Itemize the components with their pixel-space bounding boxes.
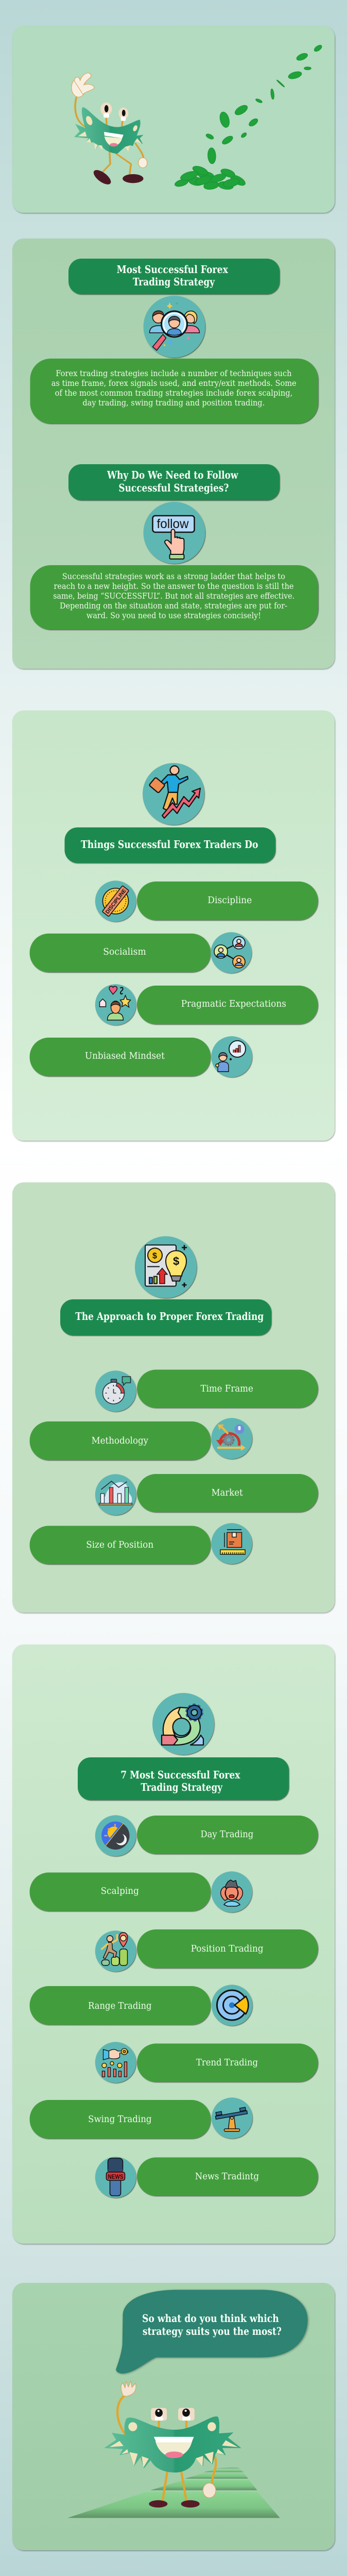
pill: pragmatic expectations: Pragmatic Expectations: [181, 999, 286, 1009]
panel: things successful forex traders do: [12, 710, 335, 1141]
pill: day trading: [137, 1816, 318, 1854]
text block: why follow strategies: ward. So you need to use strategies concisely!: [86, 611, 261, 620]
icon: market bar chart: [95, 1474, 136, 1515]
heading: things successful forex traders do: [65, 827, 275, 863]
item: time frame: [95, 1369, 318, 1412]
icon: follow button with pointing hand: follow: [157, 517, 189, 531]
pill: unbiased mindset: [30, 1038, 211, 1076]
item: socialism: [30, 932, 252, 973]
pill: unbiased mindset: Unbiased Mindset: [85, 1051, 165, 1061]
pill: trend trading: Trend Trading: [196, 2058, 258, 2068]
heading: the approach to proper forex trading: The Approach to Proper Forex Trading: [75, 1310, 264, 1323]
icon: report with coin and dollar bulb: $: [152, 1252, 157, 1260]
panel: closing question: [12, 2283, 335, 2550]
icon: follow button with pointing hand: [143, 502, 205, 564]
heading: most successful forex trading strategy: [68, 259, 280, 294]
pill: scalping: Scalping: [101, 1886, 139, 1896]
icon: businessman climbing rising arrow: [143, 763, 204, 825]
icon: man with chart thought bubble: [211, 1036, 252, 1077]
icon: news microphone: NEWS: [108, 2174, 124, 2180]
text block: forex trading strategies: [30, 359, 318, 423]
icon: social network of people: [211, 932, 252, 973]
icon: process ring with gear: [152, 1693, 214, 1755]
icon: discipline stamp: [95, 880, 136, 922]
icon: stressed man: [211, 1871, 252, 1912]
heading: most successful forex trading strategy: Trading Strategy: [133, 276, 215, 288]
item: trend trading: [95, 2042, 318, 2083]
item: day trading: [95, 1815, 318, 1856]
pill: day trading: Day Trading: [201, 1829, 253, 1840]
pill: position trading: [137, 1929, 318, 1968]
heading: why do we need to follow successful strategies: Why Do We Need to Follow: [107, 469, 239, 481]
pill: time frame: Time Frame: [201, 1384, 253, 1394]
speech bubble: [116, 2290, 307, 2374]
pill: discipline: Discipline: [207, 895, 252, 906]
pill: market: [137, 1474, 318, 1512]
pill: methodology: [30, 1421, 211, 1460]
panel: the approach to proper forex trading: [12, 1182, 335, 1613]
pill: pragmatic expectations: [137, 986, 318, 1024]
panel: most successful forex trading strategy: [12, 239, 335, 669]
text block: why follow strategies: [30, 565, 318, 630]
text block: why follow strategies: Successful strategies work as a strong ladder that helps to: [62, 572, 285, 581]
item: pragmatic expectations: [95, 984, 318, 1025]
item: unbiased mindset: [30, 1036, 252, 1077]
icon: people under magnifying glass: [143, 296, 205, 358]
pill: position trading: Position Trading: [191, 1944, 264, 1954]
heading: most successful forex trading strategy: Most Successful Forex: [117, 263, 229, 276]
icon: day and night: [95, 1815, 136, 1856]
icon: climbing to location pin: [95, 1930, 136, 1972]
text block: why follow strategies: reach to a new height. So the answer to the question is still the: [54, 582, 293, 591]
speech bubble: strategy suits you the most?: [143, 2325, 282, 2337]
item: swing trading: [30, 2097, 252, 2139]
item: methodology: [30, 1418, 252, 1460]
illustration: waving mascot: [72, 73, 147, 187]
heading: why do we need to follow successful strategies: Successful Strategies?: [118, 482, 229, 494]
pill: methodology: Methodology: [92, 1436, 148, 1446]
heading: the approach to proper forex trading: [60, 1299, 271, 1335]
icon: radar target: [212, 1985, 252, 2026]
speech bubble: So what do you think which: [142, 2312, 279, 2325]
heading: 7 most successful forex trading strategy: [78, 1757, 289, 1800]
item: scalping: [30, 1871, 252, 1912]
illustration: green steps: [67, 2467, 280, 2518]
text block: forex trading strategies: as time frame, forex signals used, and entry/exit methods. Some: [51, 379, 297, 388]
item: size of position: [30, 1523, 252, 1564]
pill: socialism: Socialism: [103, 947, 146, 957]
heading: things successful forex traders do: Things Successful Forex Traders Do: [81, 838, 258, 851]
icon: report with coin and dollar bulb: $: [173, 1255, 179, 1267]
icon: discipline stamp: DISCIPLINE: [105, 888, 128, 915]
pill: range trading: [30, 1986, 211, 2025]
panel: hero illustration: [12, 26, 335, 213]
icon: process gear with arrows: [211, 1418, 252, 1459]
pill: size of position: [30, 1526, 211, 1564]
pill: market: Market: [212, 1488, 243, 1498]
pill: size of position: Size of Position: [86, 1540, 153, 1550]
text block: forex trading strategies: Forex trading strategies include a number of techniques such: [56, 369, 292, 378]
heading: 7 most successful forex trading strategy: Trading Strategy: [141, 1781, 223, 1793]
icon: measured box: [211, 1523, 252, 1564]
icon: stopwatch: [95, 1370, 136, 1412]
heading: why do we need to follow successful strategies: [68, 464, 280, 500]
illustration: waving mascot: [104, 2381, 241, 2507]
text block: why follow strategies: same, being “SUCCESSFUL”. But not all strategies are effective.: [53, 591, 294, 601]
pill: range trading: Range Trading: [88, 2001, 151, 2011]
item: market: [95, 1474, 318, 1515]
panel: 7 most successful forex trading strategy: [12, 1645, 335, 2244]
illustration: falling dollar coins: [173, 44, 323, 191]
icon: man imagining goals: [95, 984, 136, 1025]
text block: forex trading strategies: of the most common trading strategies include forex scalping,: [55, 388, 292, 398]
icon: report with coin and dollar bulb: [135, 1236, 197, 1298]
text block: forex trading strategies: day trading, swing trading and position trading.: [82, 398, 265, 408]
icon: seesaw: [212, 2097, 252, 2139]
item: discipline: [95, 880, 318, 922]
pill: swing trading: Swing Trading: [88, 2114, 151, 2125]
pill: socialism: [30, 934, 211, 972]
text block: why follow strategies: Depending on the situation and state, strategies are put for-: [60, 601, 287, 611]
heading: 7 most successful forex trading strategy: 7 Most Successful Forex: [120, 1769, 240, 1781]
pill: news trading: [137, 2158, 318, 2196]
pill: time frame: [137, 1369, 318, 1408]
pill: swing trading: [30, 2100, 211, 2139]
pill: discipline: [137, 882, 318, 920]
pill: scalping: [30, 1872, 211, 1911]
icon: news microphone: [95, 2157, 136, 2198]
icon: hand pointing above bars: [95, 2042, 136, 2083]
item: news trading: [95, 2157, 318, 2198]
item: position trading: [95, 1929, 318, 1972]
item: range trading: [30, 1985, 252, 2026]
pill: trend trading: [137, 2043, 318, 2082]
pill: news trading: News Tradintg: [195, 2172, 259, 2182]
